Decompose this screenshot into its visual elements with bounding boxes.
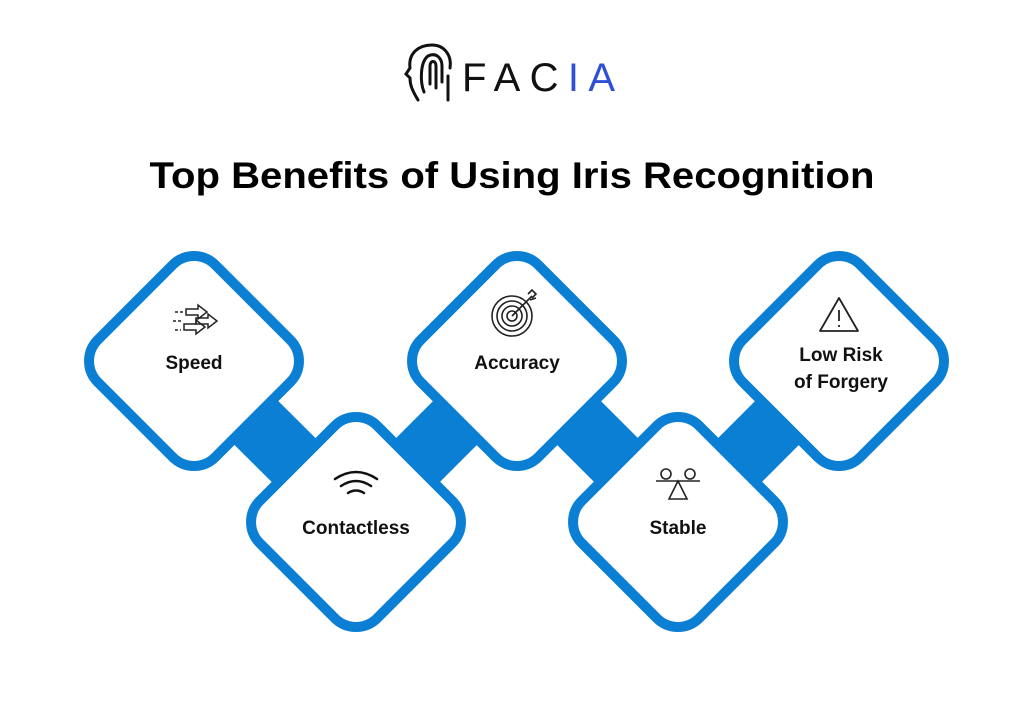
logo text: FACIA	[462, 56, 615, 100]
icon: fingerprint head	[406, 45, 450, 100]
label: speed: Speed	[165, 353, 223, 374]
icon: speed arrows	[173, 305, 217, 334]
label: accuracy: Accuracy	[474, 353, 560, 374]
icon: target	[492, 290, 536, 336]
logo	[406, 45, 615, 100]
icon: balance	[656, 469, 700, 499]
icon: wireless	[335, 472, 377, 493]
label: contactless: Contactless	[302, 518, 410, 539]
panel: speed	[77, 244, 311, 478]
connectors	[194, 361, 839, 522]
panel: stable	[561, 405, 795, 639]
label: low risk of forgery: Low Risk	[799, 345, 883, 366]
title: Top Benefits of Using Iris Recognition	[150, 155, 874, 196]
panel: low risk of forgery: of Forgery	[794, 372, 888, 393]
panel: low risk of forgery	[722, 244, 956, 478]
panel: accuracy	[400, 244, 634, 478]
panel: contactless	[239, 405, 473, 639]
label: stable: Stable	[649, 518, 707, 539]
icon: warning	[820, 298, 858, 331]
